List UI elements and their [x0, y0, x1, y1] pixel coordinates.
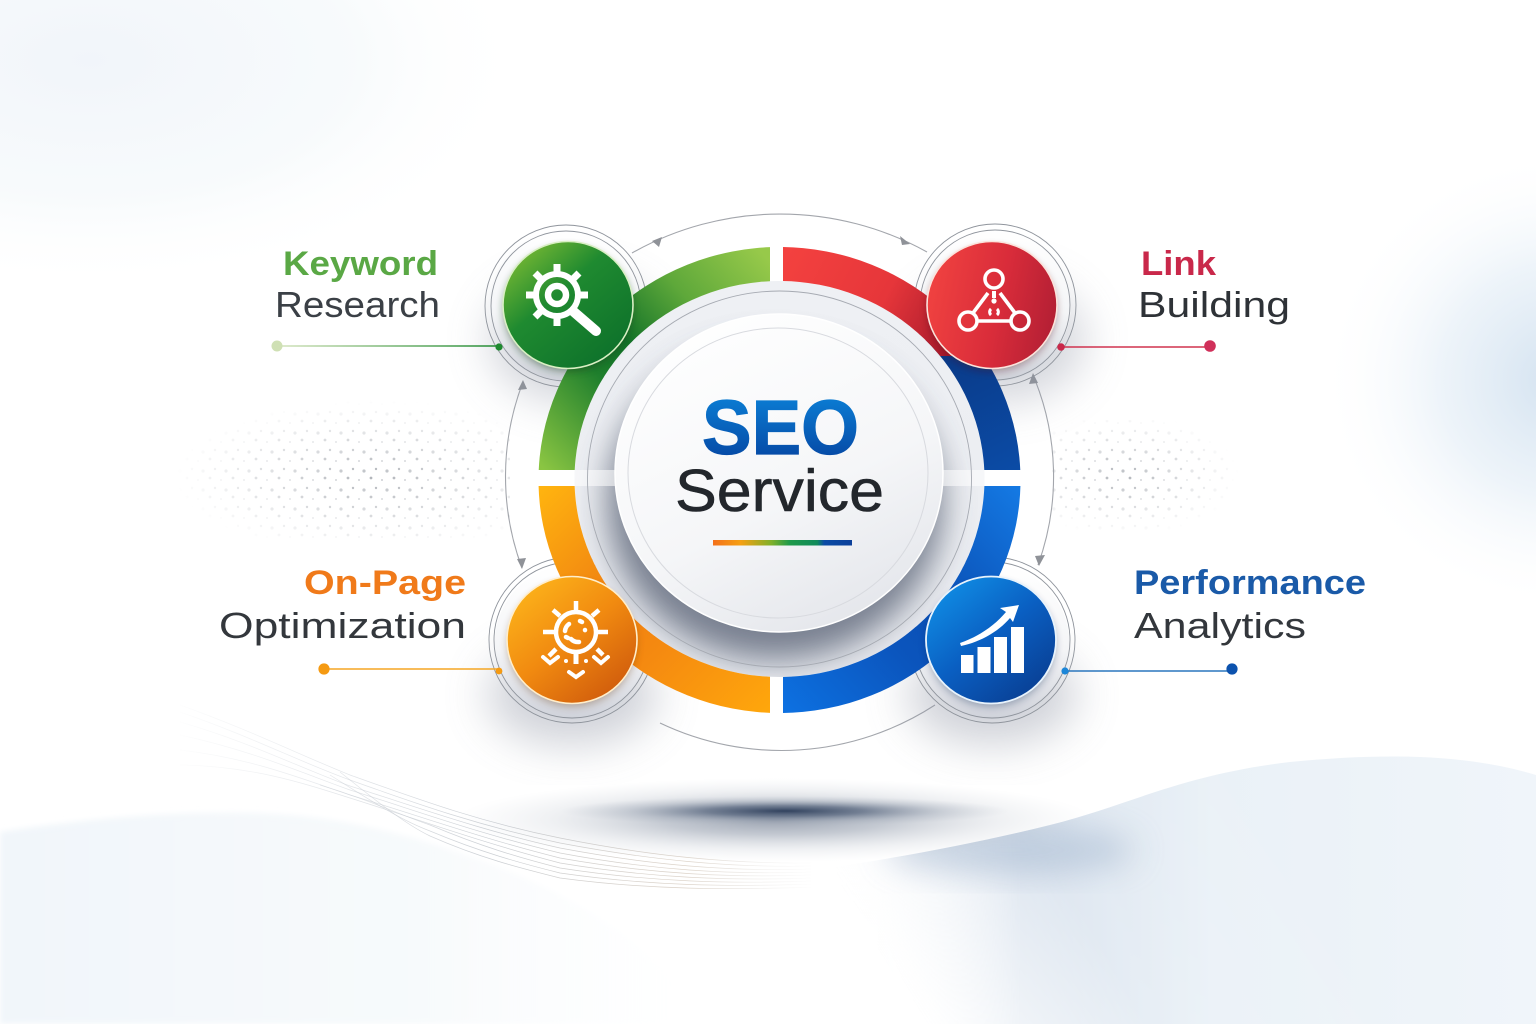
label: link building: [1057, 245, 1290, 352]
SEO heading: SEO: [702, 385, 859, 471]
left background wave: [0, 813, 720, 1024]
node: on-page optimization: [507, 576, 637, 707]
cycle arrows: [506, 214, 1054, 750]
node: performance analytics: [926, 576, 1056, 707]
icon: link triangle: [959, 270, 1029, 330]
subheading: Research: [275, 284, 440, 325]
floating shadow: [455, 778, 1095, 862]
segment: navy: [926, 340, 1020, 470]
leader line: [272, 340, 503, 352]
node: link building: [927, 242, 1057, 372]
heading: Link: [1141, 245, 1216, 283]
leader line: [318, 663, 502, 675]
ring segments: [538, 247, 1020, 713]
icon: optimization gear: [543, 601, 608, 677]
subheading: Optimization: [219, 605, 466, 646]
leader line: [1057, 340, 1216, 352]
label: performance analytics: [1061, 564, 1366, 675]
center disc: [615, 314, 943, 632]
label: keyword research: [272, 245, 503, 352]
center title: [675, 385, 884, 546]
segment: orange: [538, 486, 770, 713]
label: on-page optimization: [219, 564, 502, 675]
Service heading: Service: [675, 458, 884, 524]
right background wave: [878, 756, 1536, 1024]
icon: gear with magnifier: [526, 264, 596, 331]
segment: red: [783, 247, 952, 356]
wave line bundle: [180, 705, 815, 889]
heading: Keyword: [283, 245, 438, 283]
heading: On-Page: [304, 564, 466, 602]
segment: green: [538, 247, 770, 470]
rainbow underline: [713, 540, 852, 546]
halftone dots left: [202, 411, 510, 538]
icon: growth chart: [960, 605, 1024, 673]
leader line: [1061, 663, 1238, 675]
heading: Performance: [1134, 564, 1366, 602]
subheading: Analytics: [1134, 605, 1306, 646]
segment: blue: [783, 486, 1020, 713]
satellite halos: [485, 224, 1085, 745]
halftone dots right: [1052, 421, 1223, 528]
inner platform: [570, 281, 990, 677]
subheading: Building: [1138, 284, 1290, 325]
node: keyword research: [503, 242, 633, 372]
